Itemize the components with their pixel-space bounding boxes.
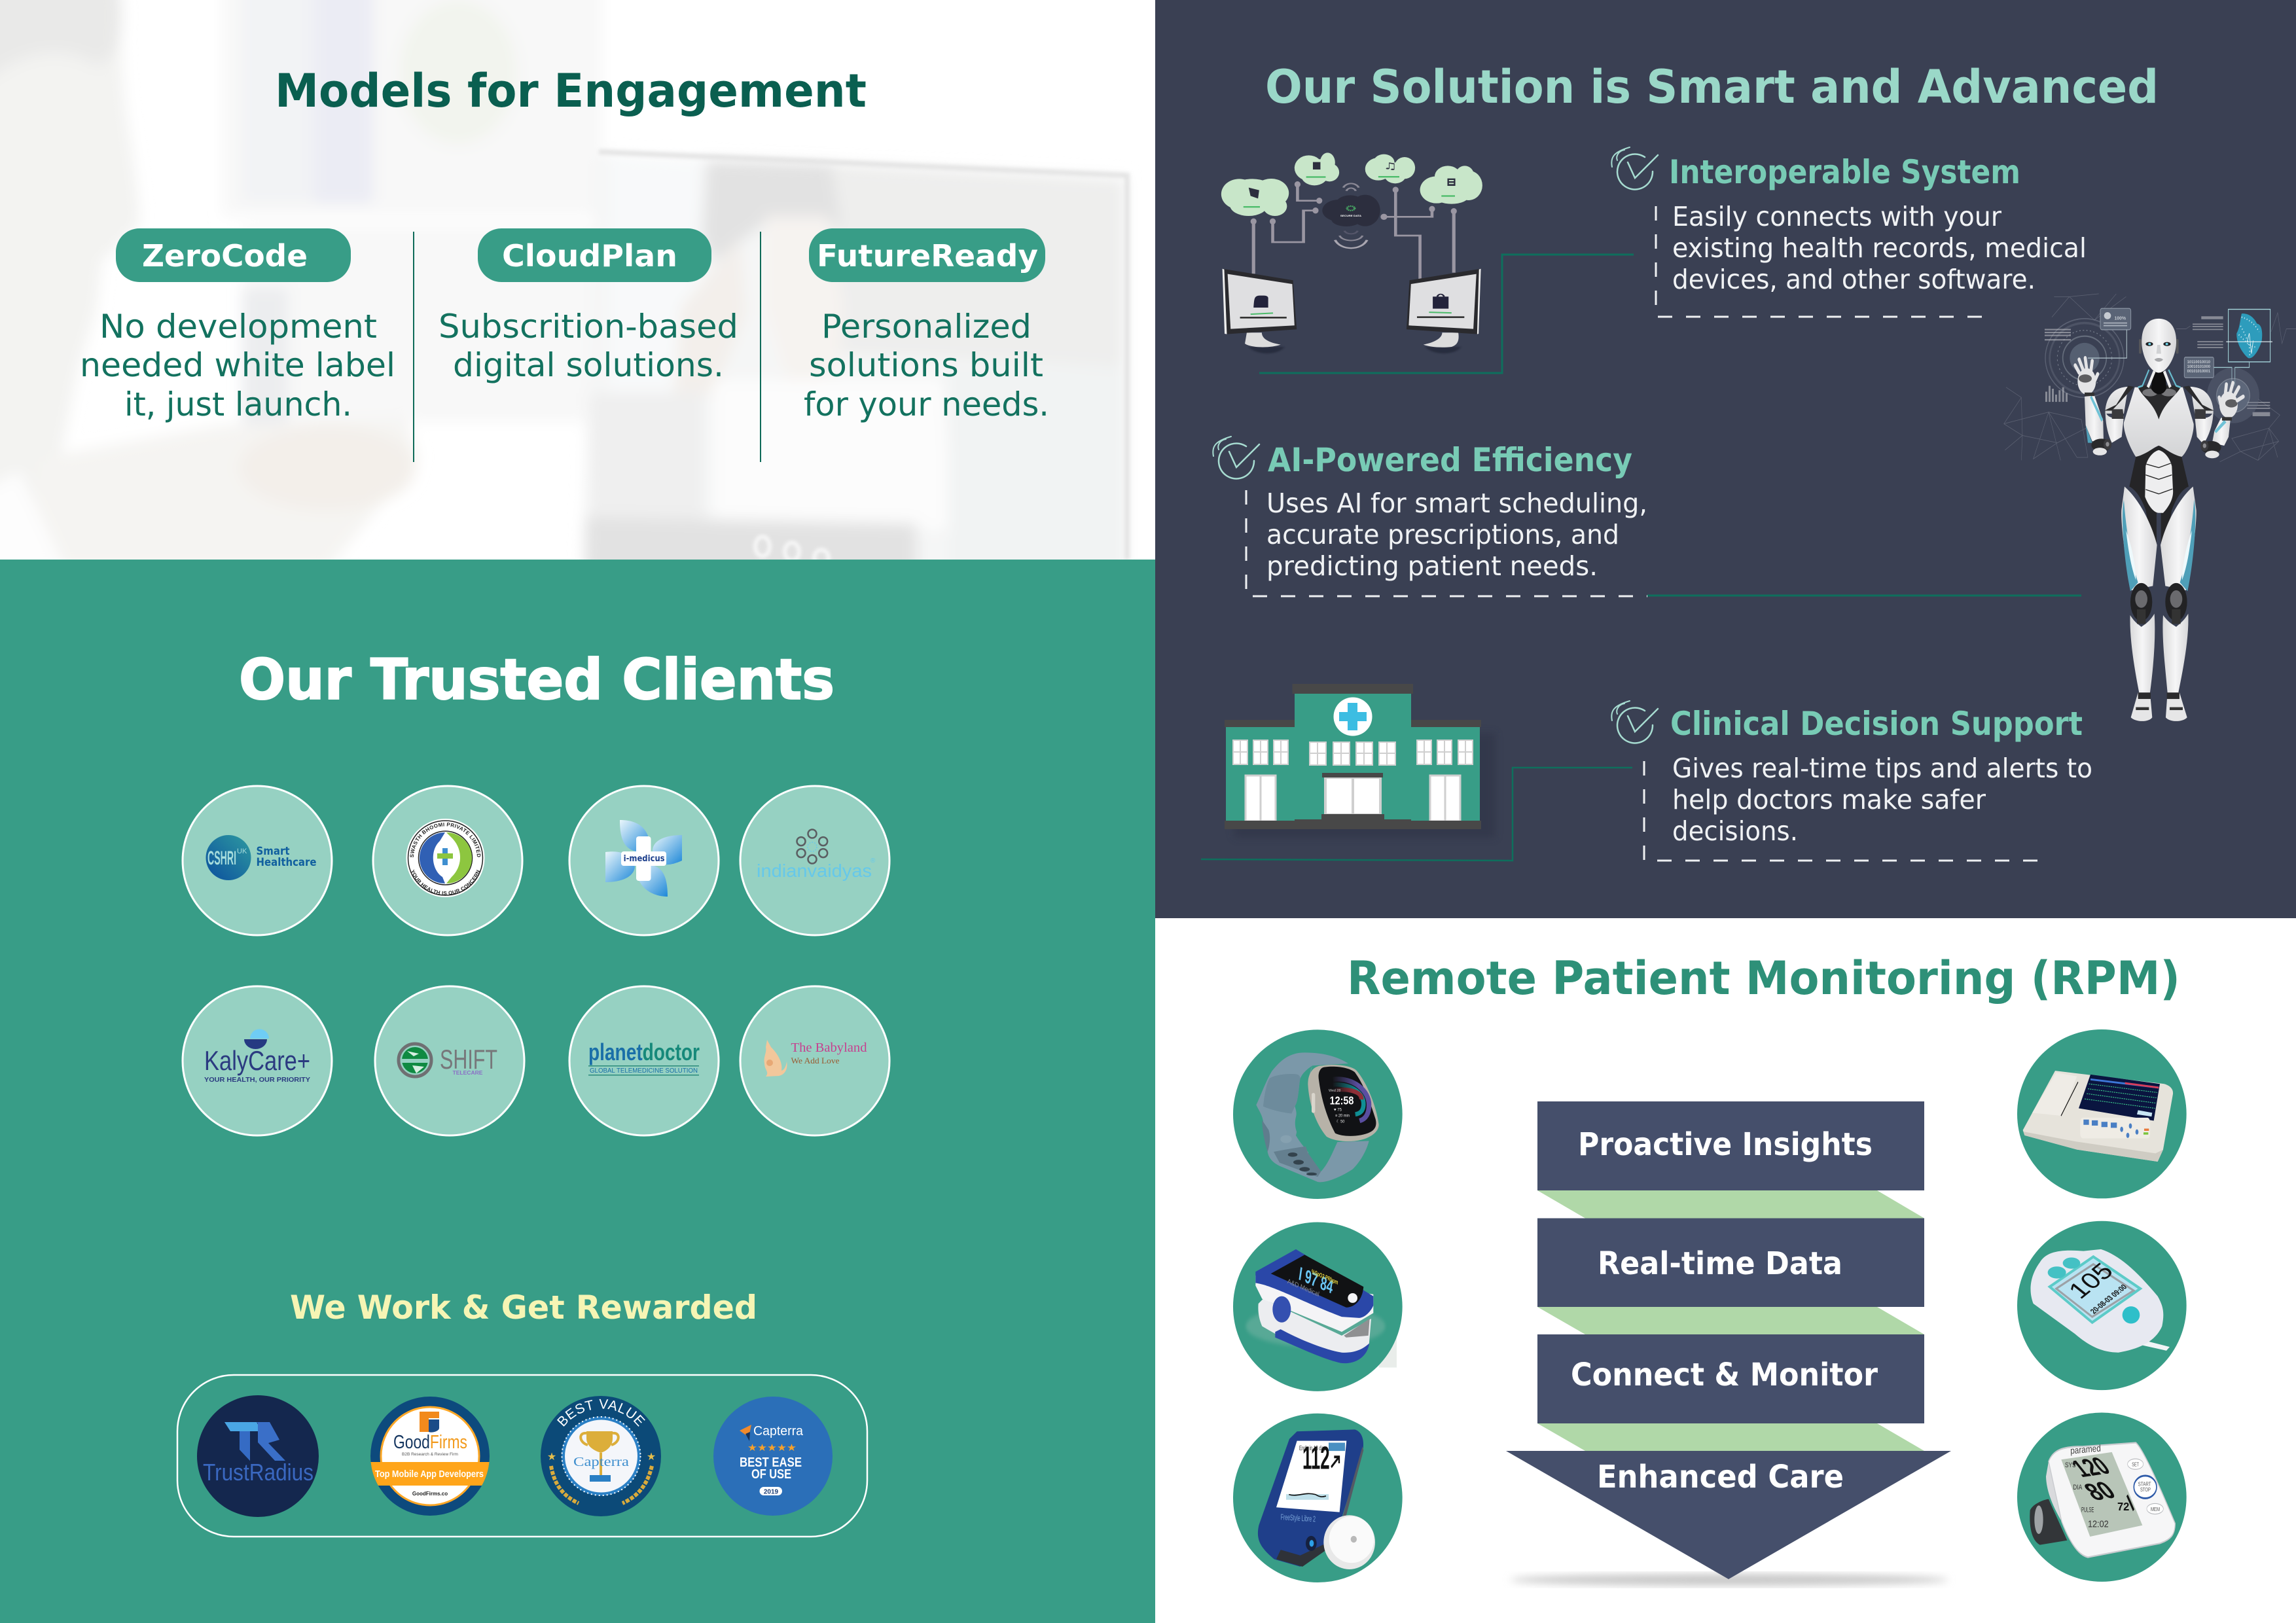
client logo: indianvaidyas (740, 786, 889, 935)
icon: check (1213, 437, 1259, 478)
title: models for engagement: Models for Engagement (275, 64, 867, 118)
funnel diagram (1506, 1101, 1951, 1586)
badge: GoodFirms: GoodFirms (393, 1432, 467, 1453)
badge: Capterra Best Ease of Use: OF USE (751, 1467, 791, 1482)
feature: clinical decision support (1611, 701, 2092, 861)
step: proactive insights: Proactive Insights (1578, 1126, 1873, 1163)
badge: Capterra Best Ease of Use: Capterra (753, 1424, 804, 1438)
client logo: KalyCare+: KalyCare+ (204, 1045, 310, 1076)
badge: Capterra Best Ease of Use (713, 1397, 833, 1516)
cloud: left (1221, 179, 1289, 216)
step: connect and monitor (1537, 1334, 1924, 1423)
connector line: interoperable (1259, 255, 1634, 373)
illustration: cloud network with monitors: SECURE DATA (1340, 215, 1361, 217)
HUD panels: 100% (2115, 316, 2126, 321)
cloud: central system (1322, 195, 1380, 226)
device: glucose monitor (1233, 1414, 1403, 1582)
title: our solution: Our Solution is Smart and Advanced (1265, 60, 2159, 114)
icon: check (1611, 147, 1658, 189)
device: blood pressure monitor: SYS (2065, 1461, 2076, 1469)
model: CloudPlan (439, 228, 738, 384)
illustration: hospital building (1225, 684, 1496, 838)
robot legs (2121, 487, 2197, 721)
device: blood pressure monitor (2017, 1413, 2187, 1582)
model: ZeroCode: needed white label (80, 346, 395, 384)
device: blood pressure monitor: 80 (2079, 1477, 2122, 1506)
step: real-time data: Real-time Data (1598, 1245, 1842, 1282)
model: ZeroCode (80, 228, 395, 423)
client logo: planetdoctor (569, 986, 719, 1135)
model: FutureReady (804, 228, 1049, 423)
cloud: music: ♫ (1383, 161, 1397, 171)
device: glucometer: 105 (2063, 1258, 2119, 1304)
client logo: CSHRI UK Smart Healthcare: CSHRI (207, 847, 236, 869)
HUD network (2004, 294, 2296, 462)
monitor: left (1223, 269, 1297, 353)
device: glucose monitor: FreeStyle Libre 2 (1281, 1513, 1316, 1524)
device: pulse oximeter: A&D Medical (1287, 1277, 1320, 1298)
feature: interoperable system: devices, and other software. (1672, 264, 2036, 295)
client logo: indianvaidyas: ® (870, 857, 876, 865)
step: connect and monitor: Connect & Monitor (1571, 1357, 1878, 1393)
device: blood pressure monitor: STOP (2140, 1488, 2151, 1493)
device: glucose monitor: 112 (1302, 1441, 1330, 1476)
model: FutureReady: solutions built (809, 346, 1043, 384)
model: FutureReady: for your needs. (804, 385, 1049, 423)
step: enhanced care (1506, 1451, 1951, 1579)
device: blood pressure monitor: 120 (2066, 1453, 2117, 1482)
device: smartwatch (1233, 1029, 1403, 1199)
device: blood pressure monitor: 72 (2117, 1500, 2129, 1512)
feature: AI-powered efficiency: AI-Powered Efficiency (1268, 441, 1632, 479)
model: CloudPlan: Subscrition-based (439, 308, 738, 346)
device: blood pressure monitor: paramed (2070, 1443, 2101, 1456)
title: remote patient monitoring: Remote Patient Monitoring (RPM) (1347, 952, 2180, 1005)
feature: interoperable system: existing health records, medical (1672, 232, 2087, 264)
illustration: cloud network with monitors (1221, 152, 1482, 353)
badge: TrustRadius (197, 1395, 319, 1517)
step: proactive insights (1537, 1101, 1924, 1190)
badge: Capterra Best Value: ★ (547, 1450, 556, 1463)
device: glucometer: 20-08-03 09:00 (2089, 1283, 2129, 1315)
feature: interoperable system: Easily connects with your (1672, 201, 2001, 232)
hospital cross (1334, 698, 1372, 736)
HUD panels: 10110010010 (2187, 361, 2210, 365)
model: FutureReady: Personalized (821, 308, 1031, 346)
robot torso (2104, 385, 2214, 545)
device column: left (1233, 1029, 1403, 1582)
model: CloudPlan: CloudPlan (502, 238, 677, 274)
feature: clinical decision support: decisions. (1672, 815, 1798, 847)
icon: check (1611, 701, 1658, 743)
device: blood pressure monitor: PULSE (2081, 1506, 2094, 1514)
device: blood pressure monitor: SET (2132, 1463, 2140, 1468)
device: blood pressure monitor: DIA (2073, 1483, 2082, 1491)
client logo: Swasth Bhoomi: SWASTH BHOOMI PRIVATE LIMITED (410, 823, 480, 857)
connector line: clinical (1201, 768, 1632, 861)
feature: AI-powered efficiency (1213, 437, 1647, 596)
client logo: CSHRI UK Smart Healthcare: Healthcare (257, 856, 317, 869)
step connectors (1537, 1190, 1924, 1451)
HUD panels: 00101010001 (2187, 369, 2210, 374)
device: smartwatch: 12:58 (1330, 1094, 1354, 1107)
badge: GoodFirms: Top Mobile App Developers (375, 1469, 484, 1480)
client logo: CSHRI UK Smart Healthcare (183, 786, 332, 935)
device: blood pressure monitor: 12:02 (2088, 1518, 2109, 1529)
feature: AI-powered efficiency: predicting patient needs. (1266, 550, 1598, 582)
cloud: image (1295, 152, 1339, 185)
step: enhanced care: Enhanced Care (1597, 1459, 1844, 1495)
badge: GoodFirms: GoodFirms.co (412, 1491, 448, 1497)
badge: Capterra Best Ease of Use: BEST EASE (740, 1455, 802, 1470)
awards row (177, 1374, 868, 1538)
device: pulse oximeter (1233, 1222, 1403, 1391)
panel: models for engagement (0, 0, 1155, 576)
panel: trusted clients and awards (0, 560, 1155, 1623)
feature: interoperable system: Interoperable System (1669, 153, 2020, 191)
robot hands (2075, 358, 2243, 421)
device: smartwatch: ♥ 75 (1334, 1107, 1342, 1112)
device: blood pressure monitor: START (2138, 1482, 2151, 1488)
client logo: CSHRI UK Smart Healthcare: UK (237, 847, 247, 855)
device: smartwatch: ≡ 20 min (1335, 1114, 1350, 1118)
device: blood pressure monitor: MEM (2151, 1507, 2160, 1512)
device: glucometer (2017, 1221, 2187, 1390)
feature: AI-powered efficiency: Uses AI for smart scheduling, (1266, 488, 1647, 519)
model: ZeroCode: it, just launch. (124, 385, 352, 423)
feature: clinical decision support: Gives real-time tips and alerts to (1672, 753, 2092, 784)
client logo: CSHRI UK Smart Healthcare: Smart (257, 845, 289, 858)
device: ECG machine (2017, 1029, 2187, 1198)
model: FutureReady: FutureReady (817, 238, 1038, 274)
feature: clinical decision support: Clinical Decision Support (1670, 705, 2083, 743)
heading: we work and get rewarded: We Work & Get Rewarded (290, 1289, 757, 1327)
robot arms (2085, 395, 2231, 458)
faded background photo (0, 0, 1127, 576)
badge: Capterra Best Value: Capterra (573, 1455, 629, 1469)
cloud: film (1420, 166, 1482, 204)
robot head and neck (2138, 319, 2181, 394)
client logo: planetdoctor: planetdoctor (588, 1039, 700, 1065)
model: ZeroCode: No development (99, 308, 377, 346)
badge: TrustRadius: TrustRadius (203, 1459, 314, 1486)
HUD panels (2088, 308, 2272, 423)
connector lines (1253, 185, 1454, 279)
cloud: music (1365, 154, 1415, 183)
client logo: i-medicus: i-medicus (624, 854, 665, 864)
client logo: Swasth Bhoomi: YOUR HEALTH IS OUR CONCERN (411, 869, 480, 895)
panel: remote patient monitoring (1155, 918, 2296, 1623)
step: real-time data (1537, 1219, 1924, 1307)
device: smartwatch: Wed 28 (1329, 1089, 1340, 1093)
HUD rings left (2045, 319, 2124, 397)
client logo: SHIFT Telecare (375, 986, 524, 1135)
device: smartwatch: ☾ 50 (1336, 1119, 1345, 1124)
feature: clinical decision support: help doctors make safer (1672, 784, 1986, 815)
badge: Capterra Best Value: ★ (647, 1450, 656, 1463)
monitor: right (1407, 269, 1481, 353)
client logo: KalyCare+: YOUR HEALTH, OUR PRIORITY (204, 1077, 310, 1084)
client logo: The Babyland: We Add Love (791, 1056, 840, 1065)
client logo: The Babyland (740, 986, 889, 1135)
title: our trusted clients: Our Trusted Clients (239, 647, 834, 713)
device column: right (2017, 1029, 2187, 1582)
client logo: SHIFT Telecare: TELECARE (453, 1070, 483, 1076)
wifi arcs (1335, 183, 1367, 248)
client logo: indianvaidyas: indianvaidyas (757, 861, 872, 881)
client logo: planetdoctor: GLOBAL TELEMEDICINE SOLUTION (590, 1067, 698, 1075)
badge: Capterra Best Ease of Use: 2019 (764, 1488, 779, 1496)
device: glucose monitor: Ends in 13 days (1299, 1444, 1327, 1452)
feature: interoperable system (1611, 147, 2087, 317)
badge: Capterra Best Ease of Use: ★★★★★ (747, 1442, 797, 1454)
panel: our solution is smart and advanced (1155, 0, 2296, 918)
client logo: SHIFT Telecare: SHIFT (440, 1044, 497, 1075)
badge: GoodFirms: B2B Research & Review Firm (402, 1452, 458, 1457)
client logo: Swasth Bhoomi (372, 785, 524, 936)
client logo: i-medicus (569, 786, 719, 935)
illustration: humanoid robot with HUD (2004, 294, 2296, 721)
badge: GoodFirms (370, 1397, 490, 1516)
client logo: The Babyland: The Babyland (791, 1041, 867, 1055)
model: CloudPlan: digital solutions. (453, 346, 724, 384)
HUD panels: 10010101000 (2187, 365, 2210, 369)
device: pulse oximeter: I 97 84 (1297, 1263, 1335, 1298)
connector line: AI to robot (1647, 594, 2081, 597)
feature: AI-powered efficiency: accurate prescriptions, and (1266, 519, 1619, 550)
device: pulse oximeter: %SpO2 PRbpm (1311, 1268, 1338, 1286)
badge: Capterra Best Value (541, 1396, 661, 1516)
model: ZeroCode: ZeroCode (142, 238, 308, 274)
badge: Capterra Best Value: BEST VALUE (557, 1399, 645, 1427)
client logo: KalyCare+ (183, 986, 332, 1135)
